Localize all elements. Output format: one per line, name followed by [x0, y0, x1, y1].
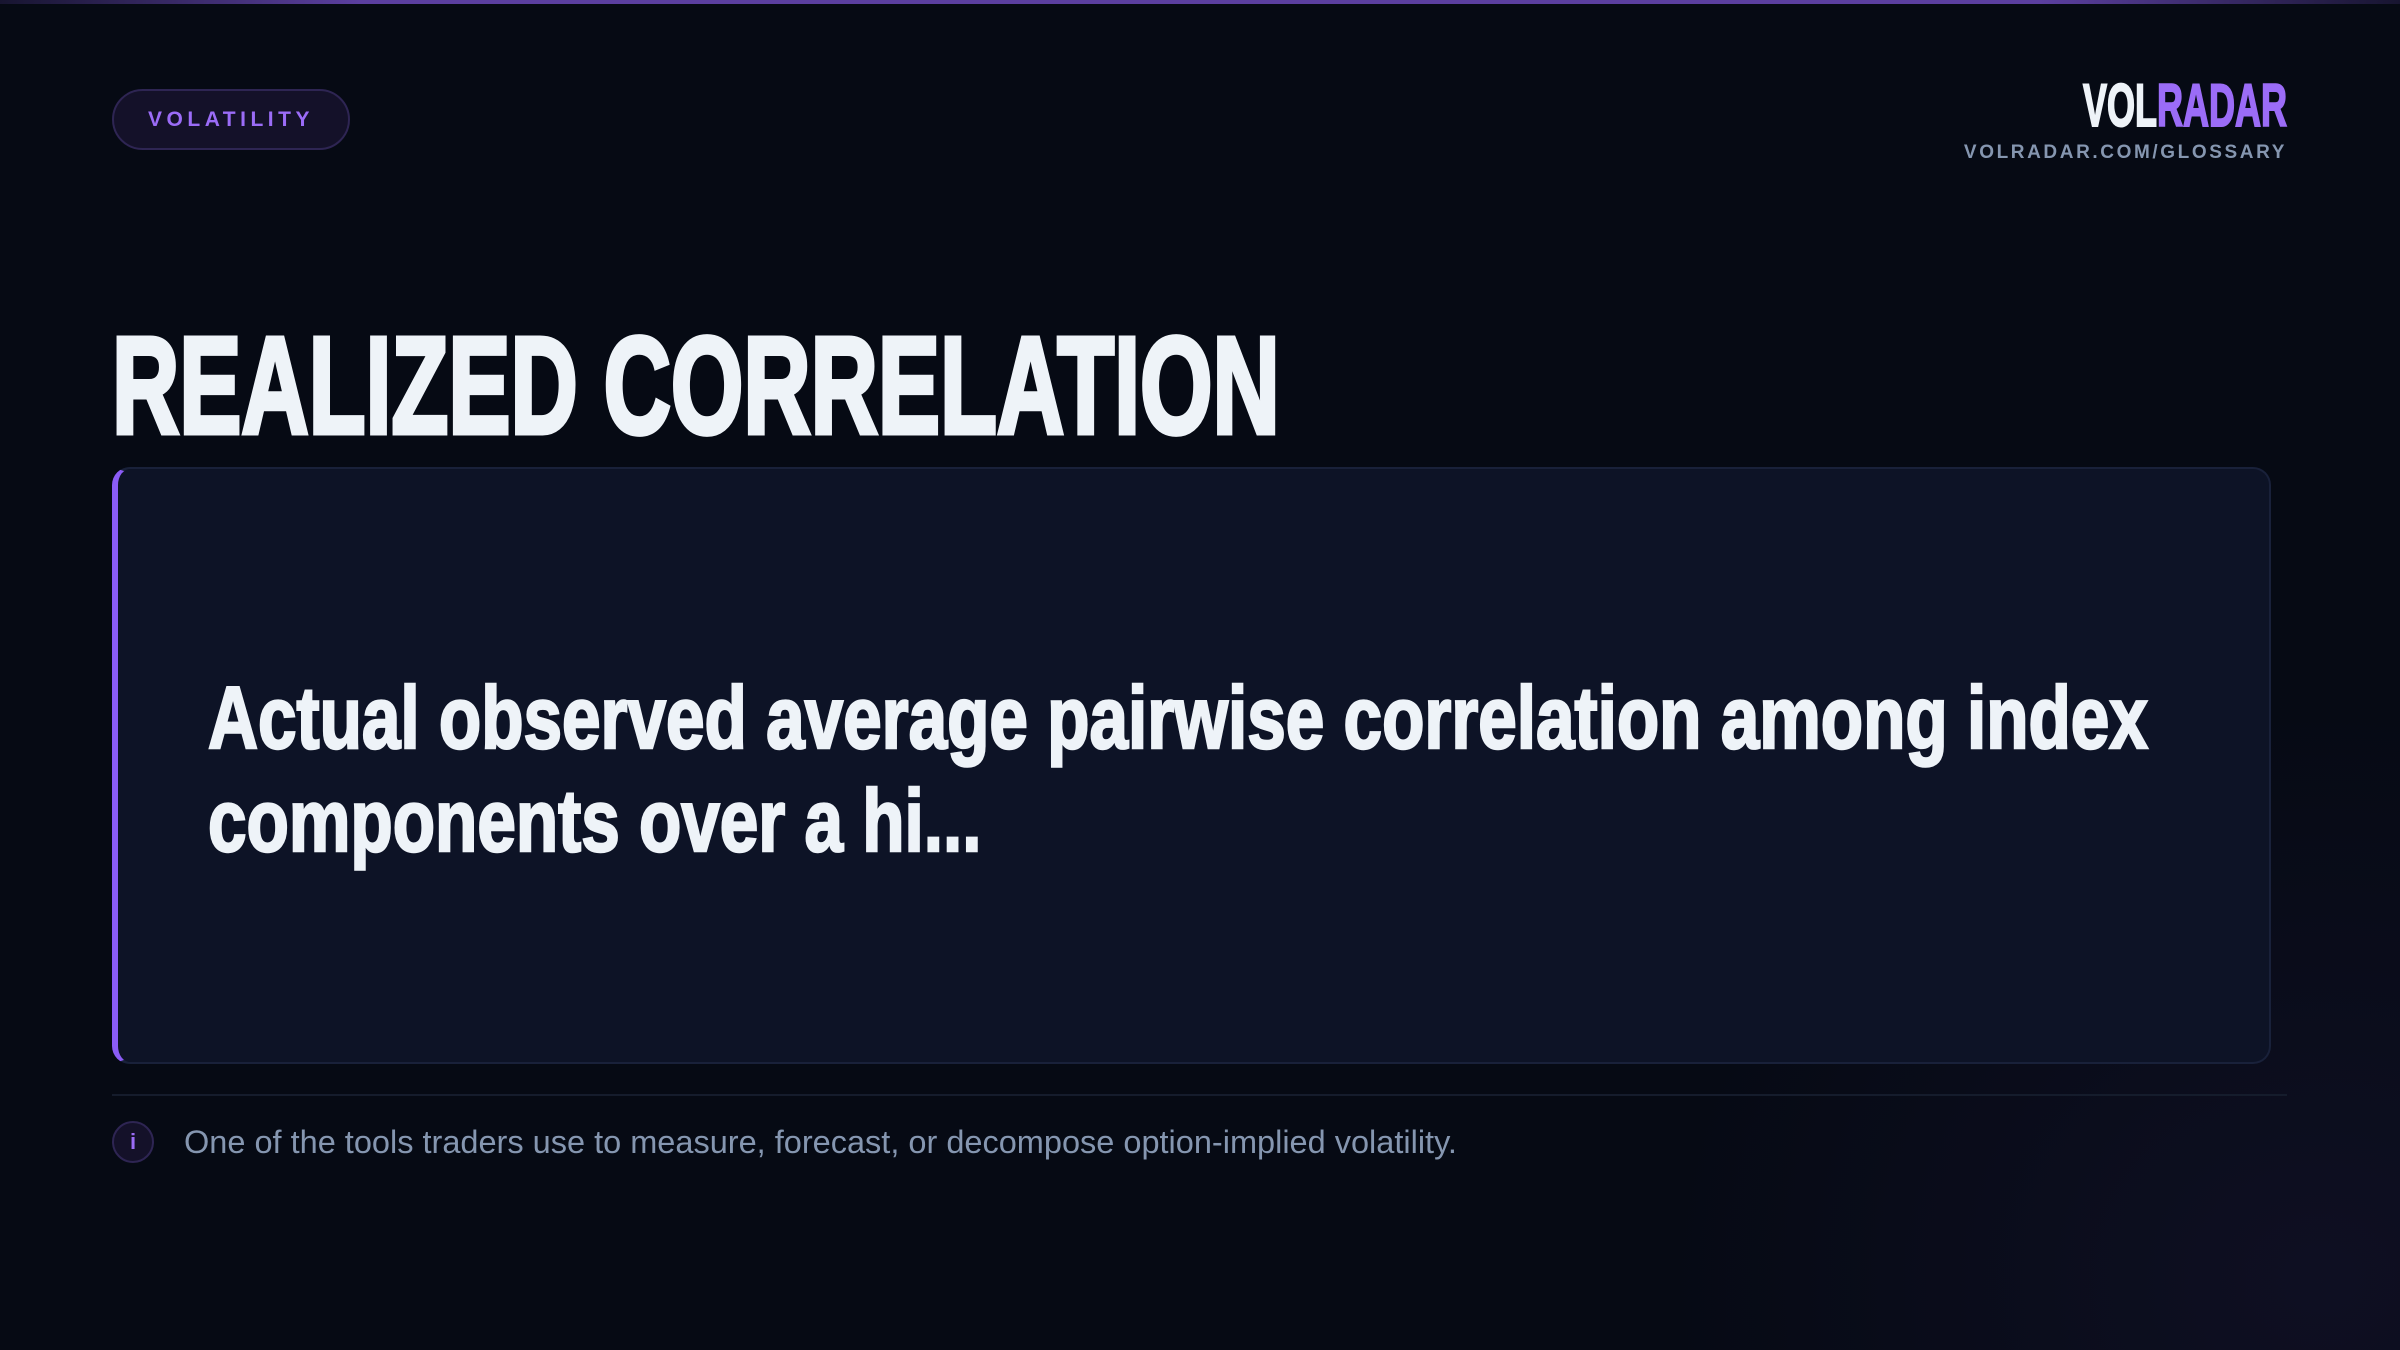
logo: VOLRADAR	[2083, 72, 2287, 139]
footnote: One of the tools traders use to measure, forecast, or decompose option-implied volatility.	[184, 1124, 1457, 1160]
panel: definition card	[112, 467, 2271, 1064]
definition text: components over a hi...	[208, 771, 982, 870]
category pill	[112, 89, 350, 150]
icon: info	[112, 1121, 154, 1163]
definition text	[208, 668, 2150, 871]
url: VOLRADAR.COM/GLOSSARY	[1964, 142, 2287, 163]
title: REALIZED CORRELATION	[112, 309, 1280, 463]
definition text: Actual observed average pairwise correlation among index	[208, 668, 2148, 767]
category pill: VOLATILITY	[148, 108, 314, 130]
icon: info: i	[130, 1129, 136, 1154]
